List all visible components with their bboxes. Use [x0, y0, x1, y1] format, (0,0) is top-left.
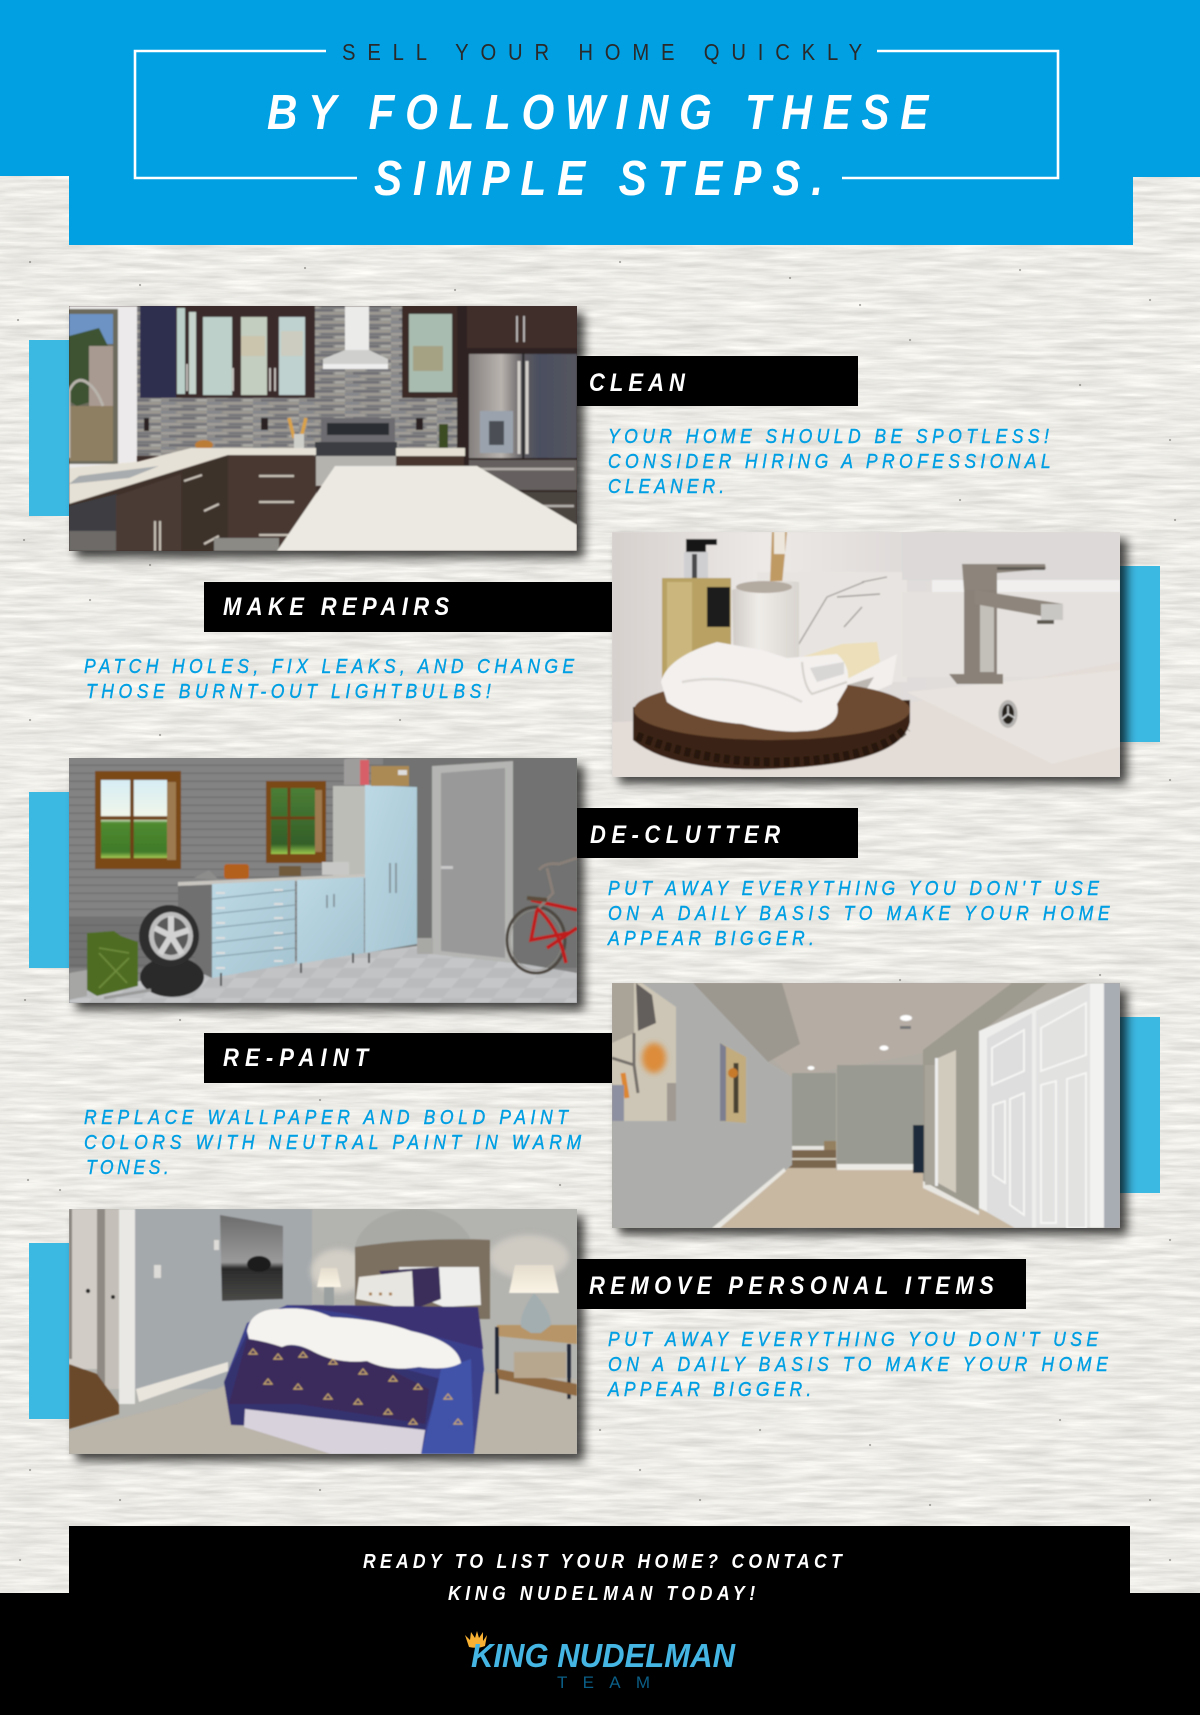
step text: re-paint: COLORS WITH NEUTRAL PAINT IN WARM: [84, 1131, 581, 1153]
step text: re-paint: [84, 1106, 581, 1178]
call to action: KING NUDELMAN TODAY!: [448, 1582, 755, 1604]
photo: hallway: [612, 983, 1120, 1228]
step heading bar: remove personal items: REMOVE PERSONAL ITEMS: [589, 1272, 994, 1299]
panel: step 3 de-clutter: [29, 758, 1110, 1010]
step text: clean: CONSIDER HIRING A PROFESSIONAL: [608, 450, 1051, 472]
panel: step 4 re-paint: [84, 983, 1160, 1235]
accent tab: [1119, 566, 1160, 742]
main title: SIMPLE STEPS.: [374, 151, 823, 206]
call to action: [363, 1550, 843, 1604]
step text: make repairs: THOSE BURNT-OUT LIGHTBULBS!: [86, 680, 492, 702]
photo: garage: [69, 758, 577, 1003]
step text: remove personal items: ON A DAILY BASIS TO MAKE YOUR HOME: [608, 1353, 1108, 1375]
step text: re-paint: REPLACE WALLPAPER AND BOLD PAINT: [84, 1106, 569, 1128]
step text: de-clutter: APPEAR BIGGER.: [607, 927, 814, 949]
step text: remove personal items: [607, 1328, 1108, 1400]
step heading bar: remove personal items: [577, 1259, 1026, 1309]
main title: BY FOLLOWING THESE: [267, 85, 930, 140]
step text: make repairs: PATCH HOLES, FIX LEAKS, AND CHANGE: [84, 655, 575, 677]
accent tab: [29, 1243, 70, 1419]
panel: step 1 clean: [29, 306, 1051, 558]
step text: clean: [608, 425, 1051, 497]
footer band: [0, 1526, 1200, 1715]
step text: clean: CLEANER.: [608, 475, 724, 497]
panel: step 2 make repairs: [84, 532, 1160, 784]
photo: bathroom sink: [612, 532, 1120, 777]
step text: remove personal items: PUT AWAY EVERYTHING YOU DON'T USE: [608, 1328, 1099, 1350]
step heading bar: re-paint: [204, 1033, 613, 1083]
step heading bar: make repairs: MAKE REPAIRS: [223, 593, 449, 620]
logo: king nudelman team: TEAM: [557, 1673, 650, 1692]
step text: make repairs: [84, 655, 575, 702]
header frame: [135, 51, 1058, 178]
logo: king nudelman team: KING NUDELMAN: [471, 1637, 736, 1674]
step text: remove personal items: APPEAR BIGGER.: [607, 1378, 811, 1400]
accent tab: [1119, 1017, 1160, 1193]
accent tab: [29, 792, 70, 968]
icon: crown: [465, 1631, 487, 1648]
photo: bedroom: [69, 1209, 577, 1454]
header banner: [0, 0, 1200, 245]
panel: step 5 remove personal items: [29, 1209, 1108, 1461]
step heading bar: de-clutter: [577, 808, 858, 858]
step heading bar: de-clutter: DE-CLUTTER: [590, 821, 780, 848]
step text: re-paint: TONES.: [86, 1156, 169, 1178]
step text: de-clutter: [607, 877, 1110, 949]
logo: king nudelman team: [465, 1631, 736, 1692]
call to action: READY TO LIST YOUR HOME? CONTACT: [363, 1550, 843, 1572]
step text: de-clutter: PUT AWAY EVERYTHING YOU DON'T USE: [608, 877, 1099, 899]
step text: clean: YOUR HOME SHOULD BE SPOTLESS!: [608, 425, 1050, 447]
eyebrow heading: SELL YOUR HOME QUICKLY: [342, 39, 862, 65]
photo: kitchen: [69, 306, 577, 551]
step heading bar: re-paint: RE-PAINT: [223, 1044, 371, 1071]
step heading bar: make repairs: [204, 582, 613, 632]
step text: de-clutter: ON A DAILY BASIS TO MAKE YOUR HOME: [608, 902, 1110, 924]
main title: [267, 85, 930, 206]
accent tab: [29, 340, 70, 516]
step heading bar: clean: CLEAN: [589, 369, 686, 396]
step heading bar: clean: [577, 356, 858, 406]
